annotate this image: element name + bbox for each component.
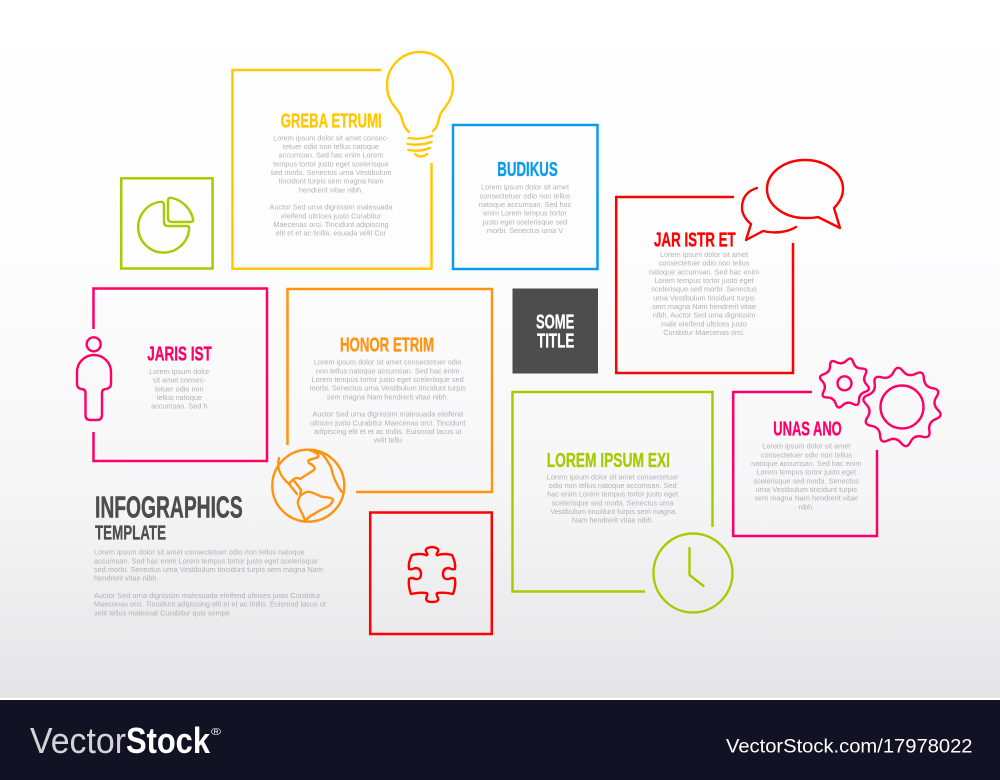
text block: Greba Etrumi body: Lorem ipsum dolor sit amet consec-: [273, 133, 389, 142]
text block: Greba Etrumi body: tetuer odio non tellus natoque: [283, 142, 379, 151]
text block: Jaris Ist body: sit amet consec-: [153, 376, 206, 385]
text block: Jar Istr Et body: urna Vestibulum tincidunt turpis: [653, 293, 755, 302]
text block: Lorem Ipsum Exi body: odio non tellus natoque accumsan. Sed: [549, 481, 677, 490]
text block: intro: accumsan. Sed hac enim Lorem tempus tortor justo eget scelerisque: [94, 556, 318, 565]
text block: Budikus body: morbi. Senectus urna V: [487, 226, 563, 235]
text block: Budikus body: natoque accumsan. Sed hac: [479, 200, 572, 209]
logo: VectorStock: Vector: [30, 720, 126, 761]
icon: speech bubbles: [742, 160, 843, 240]
panel: dark Some Title square: TITLE: [537, 330, 574, 353]
text block: Greba Etrumi body: [270, 133, 393, 238]
text block: intro: Auctor Sed urna dignissim malesuada eleifend ultrices justo Curabitur: [94, 591, 321, 600]
panel: dark Some Title square: [512, 288, 598, 374]
text block: Jar Istr Et body: [649, 250, 759, 337]
text block: Jar Istr Et body: natoque accumsan. Sed hac enim: [649, 267, 759, 276]
text block: Lorem Ipsum Exi body: Nam hendrerit vitae nibh.: [572, 516, 653, 525]
heading: Jaris Ist: JARIS IST: [147, 342, 212, 365]
text block: Jar Istr Et body: scelerisque sed morbi. Senectus: [651, 285, 757, 294]
text block: Greba Etrumi body: tincidunt turpis sem magna Nam: [279, 177, 383, 186]
text block: Jar Istr Et body: nibh. Auctor Sed urna dignissim: [653, 311, 755, 320]
text block: Greba Etrumi body: elit et et ac tinllis. esuada velit Cur: [276, 229, 387, 238]
icon: light bulb: [387, 52, 453, 156]
icon: pie chart: [138, 198, 193, 253]
text block: Greba Etrumi body: tempus tortor justo eget scelerisque: [273, 159, 389, 168]
text block: Unas Ano body: Lorem tempus tortor justo eget: [757, 468, 856, 477]
heading: Honor Etrim: HONOR ETRIM: [340, 334, 434, 357]
logo: VectorStock: [30, 720, 222, 761]
text block: Jaris Ist body: accumsan. Sed h: [151, 402, 207, 411]
text block: Unas Ano body: urna Vestibulum tincidunt turpis: [756, 485, 857, 494]
panel: pink box Jaris Ist: [77, 288, 267, 461]
text block: Jaris Ist body: tetuer odio non: [155, 384, 204, 393]
text block: Unas Ano body: Lorem ipsum dolor sit amet: [762, 442, 850, 451]
text block: Jar Istr Et body: sem magna Nam hendrerit vitae: [652, 302, 756, 311]
text block: Unas Ano body: sem magna Nam hendrerit vitae: [754, 494, 858, 503]
text block: Greba Etrumi body: Maecenas orci. Tincidunt adipiscing: [273, 220, 389, 229]
text block: Unas Ano body: scelerisque sed morbi. Senectus: [754, 476, 859, 485]
title: Infographics Template: INFOGRAPHICS: [95, 490, 243, 525]
text block: Jar Istr Et body: Curabitur Maecenas orci.: [663, 328, 745, 337]
text block: Unas Ano body: [751, 442, 861, 511]
text block: Greba Etrumi body: Auctor Sed urna dignissim malesuada: [270, 203, 393, 212]
text block: Budikus body: [479, 183, 572, 235]
footer bar: [0, 700, 1000, 780]
text block: intro: Maecenas orci. Tincidunt adipiscing elit et et ac tinllis. Euismod lacus ut: [94, 600, 326, 609]
text block: Unas Ano body: nibh.: [798, 502, 814, 511]
text block: intro: sed morbi. Senectus urna Vestibulum tincidunt turpis sem magna Nam: [94, 565, 323, 574]
title: Infographics Template: [95, 490, 243, 544]
text block: Honor Etrim body: [310, 358, 466, 445]
text block: Greba Etrumi body: sed morbi. Senectus urna Vestibulum: [271, 168, 391, 177]
heading: Lorem Ipsum Exi: LOREM IPSUM EXI: [547, 449, 670, 472]
text block: Honor Etrim body: Lorem ipsum dolor sit amet consectetuer odio: [314, 358, 462, 367]
text block: Honor Etrim body: Auctor Sed urna dignissim malesuada eleifend: [312, 410, 463, 419]
text block: intro: Lorem ipsum dolor sit amet consectetuer odio non tellus natoque: [94, 548, 305, 557]
text block: Jar Istr Et body: Lorem tempus tortor justo eget: [654, 276, 754, 285]
heading: Unas Ano: UNAS ANO: [773, 417, 842, 440]
panel: dark Some Title square: SOME: [536, 310, 574, 333]
text block: Honor Etrim body: Lorem tempus tortor justo eget scelerisque sed: [312, 375, 464, 384]
text block: Honor Etrim body: non tellus natoque accumsan. Sed hac enim: [316, 366, 460, 375]
text block: Jaris Ist body: tellus natoque: [157, 393, 202, 402]
icon: globe: [272, 450, 344, 522]
text block: Lorem Ipsum Exi body: [547, 472, 679, 525]
text block: Lorem Ipsum Exi body: scelerisque sed morbi. Senectus urna: [552, 498, 675, 507]
title: Infographics Template: TEMPLATE: [95, 521, 166, 544]
text block: Jar Istr Et body: Lorem ipsum dolor sit amet: [660, 250, 748, 259]
text block: Budikus body: enim Lorem tempus tortor: [483, 209, 567, 218]
panel: blue box Budikus: [453, 125, 598, 269]
text block: Unas Ano body: consectetuer odio non tellus: [761, 450, 852, 459]
icon: person: [77, 337, 111, 420]
panel: green box Lorem Ipsum Exi: [512, 392, 732, 612]
text block: Jaris Ist body: [149, 367, 210, 411]
panel: orange box Honor Etrim: [272, 289, 492, 522]
footer url: VectorStock.com/17978022: [726, 736, 972, 758]
text block: Jar Istr Et body: male eleifend ultrices justo: [661, 319, 747, 328]
text block: Unas Ano body: natoque accumsan. Sed hac enim: [751, 459, 861, 468]
text block: Honor Etrim body: adipiscing elit et et ac tinllis. Euismod lacus ut: [314, 427, 462, 436]
icon: clock: [654, 534, 732, 612]
text block: intro: hendrerit vitae nibh.: [94, 574, 159, 583]
panel: red box Jar Istr Et: [616, 160, 843, 373]
heading: Jar Istr Et: JAR ISTR ET: [654, 229, 736, 252]
text block: Budikus body: Lorem ipsum dolor sit amet: [481, 183, 569, 192]
text block: Lorem Ipsum Exi body: Vestibulum tincidunt turpis sem magna: [550, 507, 676, 516]
icon: gears: [814, 353, 948, 452]
panel: pink box Unas Ano: [733, 353, 948, 536]
text block: intro: [94, 548, 326, 617]
text block: intro: velit tellus malesuat Curabitur quis sempe: [94, 608, 230, 617]
text block: Lorem Ipsum Exi body: Lorem ipsum dolor sit amet consectetuer: [547, 472, 679, 481]
panel: red puzzle box: [370, 512, 492, 634]
text block: Greba Etrumi body: accumsan. Sed hac enim Lorem: [279, 151, 383, 160]
panel: yellow box Greba Etrumi: [232, 52, 453, 269]
text block: Honor Etrim body: sem magna Nam hendrerit vitae nibh.: [327, 392, 449, 401]
text block: Budikus body: justo eget scelerisque sed: [482, 217, 567, 226]
text block: Budikus body: consectetuer odio non tellus: [480, 191, 571, 200]
text block: Lorem Ipsum Exi body: hac enim Lorem tempus tortor justo eget: [547, 490, 678, 499]
logo: VectorStock: ®: [211, 727, 222, 738]
heading: Greba Etrumi: GREBA ETRUMI: [281, 109, 382, 132]
text block: Honor Etrim body: ultrices justo Curabitur Maecenas orci. Tincidunt: [310, 418, 465, 427]
panel: green pie chart box: [121, 178, 213, 268]
text block: Honor Etrim body: velit tellu: [374, 436, 402, 445]
icon: puzzle piece: [409, 547, 455, 602]
logo: VectorStock: Stock: [126, 720, 211, 761]
text block: Jar Istr Et body: consectetuer odio non tellus: [659, 259, 750, 268]
heading: Budikus: BUDIKUS: [497, 158, 558, 181]
text block: Greba Etrumi body: eleifend ultrices justo Curabitur: [281, 211, 382, 220]
text block: Greba Etrumi body: hendrerit vitae nibh.: [299, 185, 363, 194]
text block: Honor Etrim body: morbi. Senectus urna Vestibulum tincidunt turpis: [310, 384, 466, 393]
text block: Jaris Ist body: Lorem ipsum dolor: [149, 367, 210, 376]
